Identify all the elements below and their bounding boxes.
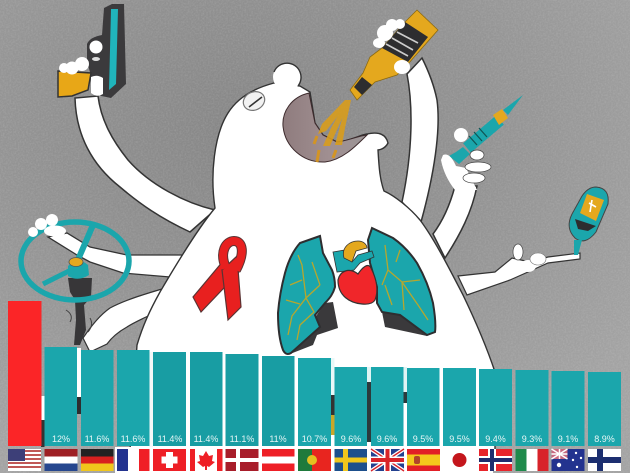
bar: Denmark: 11.1%: [230, 434, 254, 444]
left lung: [278, 236, 338, 354]
flag: Germany: [81, 449, 114, 471]
bar: Italy: [516, 370, 548, 446]
icon: whiskey bottle and hand: [350, 10, 438, 100]
flag: Finland: [588, 449, 621, 471]
bar: Canada: [190, 352, 222, 446]
bar: Portugal: 10.7%: [302, 434, 327, 444]
bar: Canada: 11.4%: [194, 434, 218, 444]
bar: Switzerland: [153, 352, 186, 446]
flag: Japan: [443, 449, 476, 471]
bar: Netherlands: [44, 347, 77, 446]
bar: Japan: 9.5%: [449, 434, 470, 444]
bar: Austria: 11%: [269, 434, 287, 444]
arm: holding syringe: [433, 186, 477, 258]
flag: Austria: [262, 449, 294, 471]
bar chart: [8, 301, 621, 446]
flag: Spain: [407, 449, 440, 471]
bar: Netherlands: 12%: [52, 434, 70, 444]
arm: steering wheel: [48, 233, 190, 277]
bar: UK: 9.6%: [377, 434, 397, 444]
bar: Spain: 9.5%: [413, 434, 433, 444]
lungs and heart: [278, 228, 435, 354]
flag: UK: [371, 449, 404, 471]
flag: Norway: [479, 449, 512, 471]
bar: Germany: 11.6%: [85, 434, 109, 444]
bar: Austria: [262, 356, 294, 446]
bar: Japan: [443, 368, 476, 446]
icon: red AIDS ribbon: [193, 241, 242, 320]
body: [130, 63, 495, 450]
flag: Denmark: [226, 449, 258, 471]
bar: Spain: [407, 368, 440, 446]
arm: upper right holding bottle: [402, 58, 438, 222]
bar: Switzerland: 11.4%: [158, 434, 182, 444]
flag row: [8, 447, 621, 473]
bar: Norway: [479, 369, 512, 446]
bar: Norway: 9.4%: [485, 434, 506, 444]
right lung: [368, 228, 435, 336]
flag: Australia: [552, 449, 584, 471]
bar: Sweden: 9.6%: [341, 434, 361, 444]
icon: gun: [58, 4, 126, 98]
flag: Netherlands: [44, 449, 78, 471]
icon: syringe and hand: [441, 95, 523, 190]
mouth: [283, 93, 367, 162]
bar: Australia: 9.1%: [558, 434, 578, 444]
eye: [240, 88, 268, 114]
bar: France: 11.6%: [121, 434, 145, 444]
bar: Denmark: [226, 354, 258, 446]
flag: France: [117, 449, 150, 471]
heart: [333, 241, 377, 304]
flag: Portugal: [298, 449, 331, 471]
flag: Sweden: [334, 449, 367, 471]
icon: glucose meter and hand: [513, 187, 608, 272]
arm: holding gun: [75, 96, 215, 232]
bar: USA: [8, 301, 42, 446]
flag: USA: [8, 449, 41, 471]
flag: Italy: [516, 449, 548, 471]
bar: Germany: [81, 350, 114, 446]
details behind the bars: [41, 348, 407, 447]
bar: France: [117, 350, 150, 446]
flag: Switzerland: [153, 449, 186, 471]
bar: Italy: 9.3%: [522, 434, 542, 444]
arm: holding glucose meter: [458, 253, 580, 295]
flag: Canada: [190, 449, 222, 471]
icon: steering wheel and hand: [21, 214, 129, 345]
bar: UK: [371, 367, 404, 446]
bar: Australia: [552, 371, 584, 446]
bar: Finland: 8.9%: [594, 434, 615, 444]
bar: Sweden: [334, 367, 367, 446]
bar: Portugal: [298, 358, 331, 446]
arm: lower left: [83, 289, 162, 352]
bar: Finland: [588, 372, 621, 446]
whiskey stream: [314, 100, 351, 162]
